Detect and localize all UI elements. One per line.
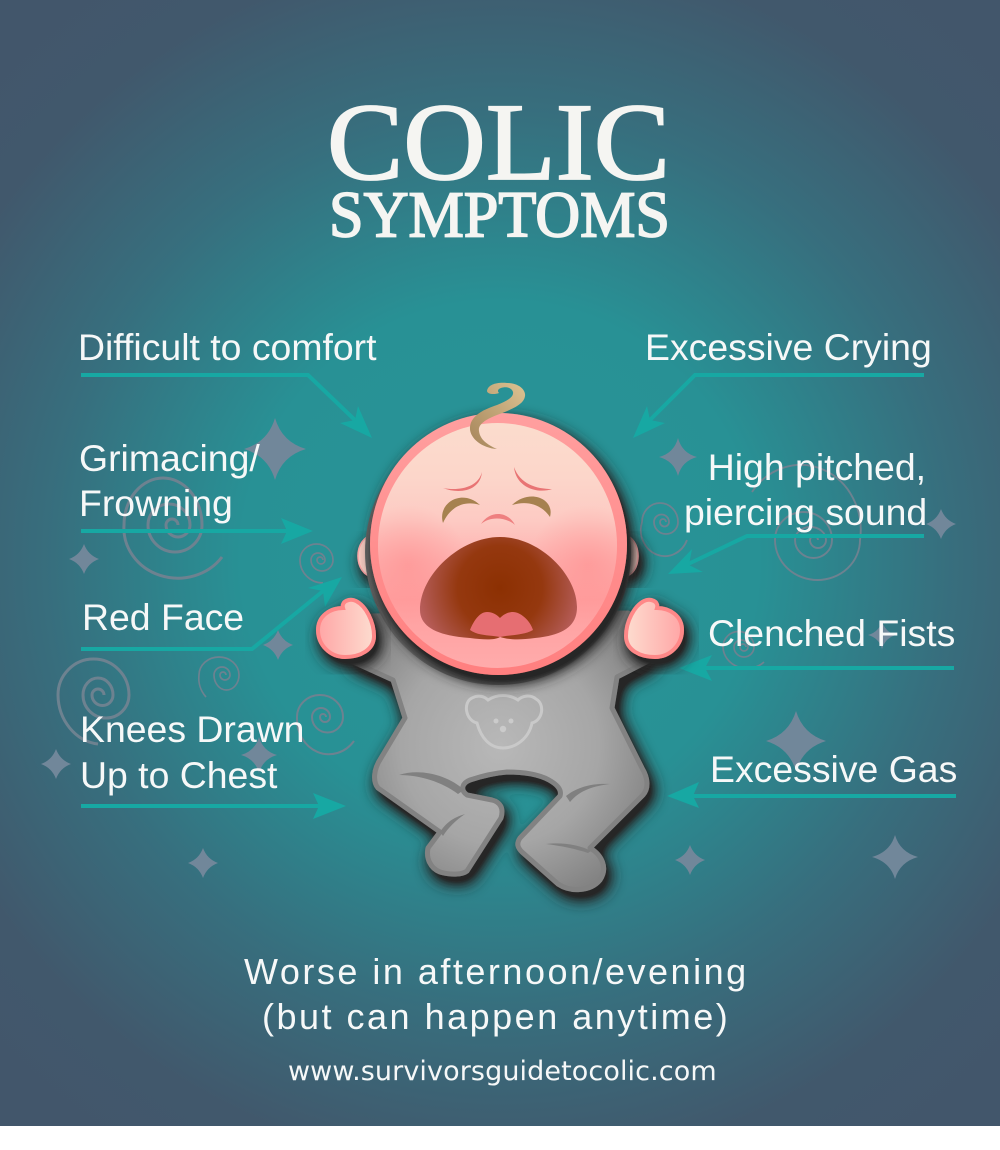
label: excessive crying: Excessive Crying (645, 326, 932, 368)
arrow: difficult to comfort (81, 375, 372, 438)
eyebrows (443, 467, 552, 491)
label: knees drawn up to chest (80, 708, 304, 796)
label: high pitched, piercing sound: High pitched, (708, 446, 926, 488)
crying baby illustration (318, 383, 682, 890)
label: grimacing/frowning (79, 437, 260, 524)
title: COLIC (327, 81, 670, 203)
nose (481, 514, 515, 525)
footer note (244, 951, 749, 1037)
label: high pitched, piercing sound (684, 446, 927, 533)
label: knees drawn up to chest: Up to Chest (80, 754, 277, 796)
arrow: knees drawn (81, 793, 346, 819)
label: clenched fists: Clenched Fists (708, 612, 955, 654)
collar (365, 419, 631, 685)
website url: www.survivorsguidetocolic.com (288, 1056, 717, 1087)
ears (358, 536, 638, 576)
footer note: (but can happen anytime) (262, 996, 730, 1037)
bear emblem (466, 696, 542, 748)
label: grimacing/frowning: Frowning (79, 482, 233, 524)
label: difficult to comfort: Difficult to comfort (78, 326, 377, 368)
label: knees drawn up to chest: Knees Drawn (80, 708, 304, 750)
right fist (626, 600, 682, 657)
arrow: red face (81, 577, 342, 649)
arrow: clenched fists (679, 655, 954, 681)
footer note: Worse in afternoon/evening (244, 951, 749, 992)
title: SYMPTOMS (329, 178, 670, 252)
baby body: grey sleepsuit (348, 613, 650, 890)
label: grimacing/frowning: Grimacing/ (79, 437, 260, 479)
tongue (470, 612, 533, 637)
open mouth (420, 537, 577, 639)
label: excessive gas: Excessive Gas (710, 748, 957, 790)
head (370, 413, 627, 675)
closed eyes (442, 497, 551, 523)
arrow: high pitched (668, 536, 924, 574)
left fist (318, 600, 374, 657)
decorative spirals (58, 465, 861, 754)
sleepsuit folds (399, 772, 610, 853)
arrow: grimacing (81, 518, 313, 544)
arrow: excessive crying (633, 375, 924, 438)
label: high pitched, piercing sound: piercing sound (684, 491, 927, 533)
arrow: excessive gas (667, 782, 956, 808)
label: red face: Red Face (82, 596, 244, 638)
decorative sparkles (41, 418, 956, 879)
hair curl (470, 383, 525, 449)
title (327, 81, 670, 252)
